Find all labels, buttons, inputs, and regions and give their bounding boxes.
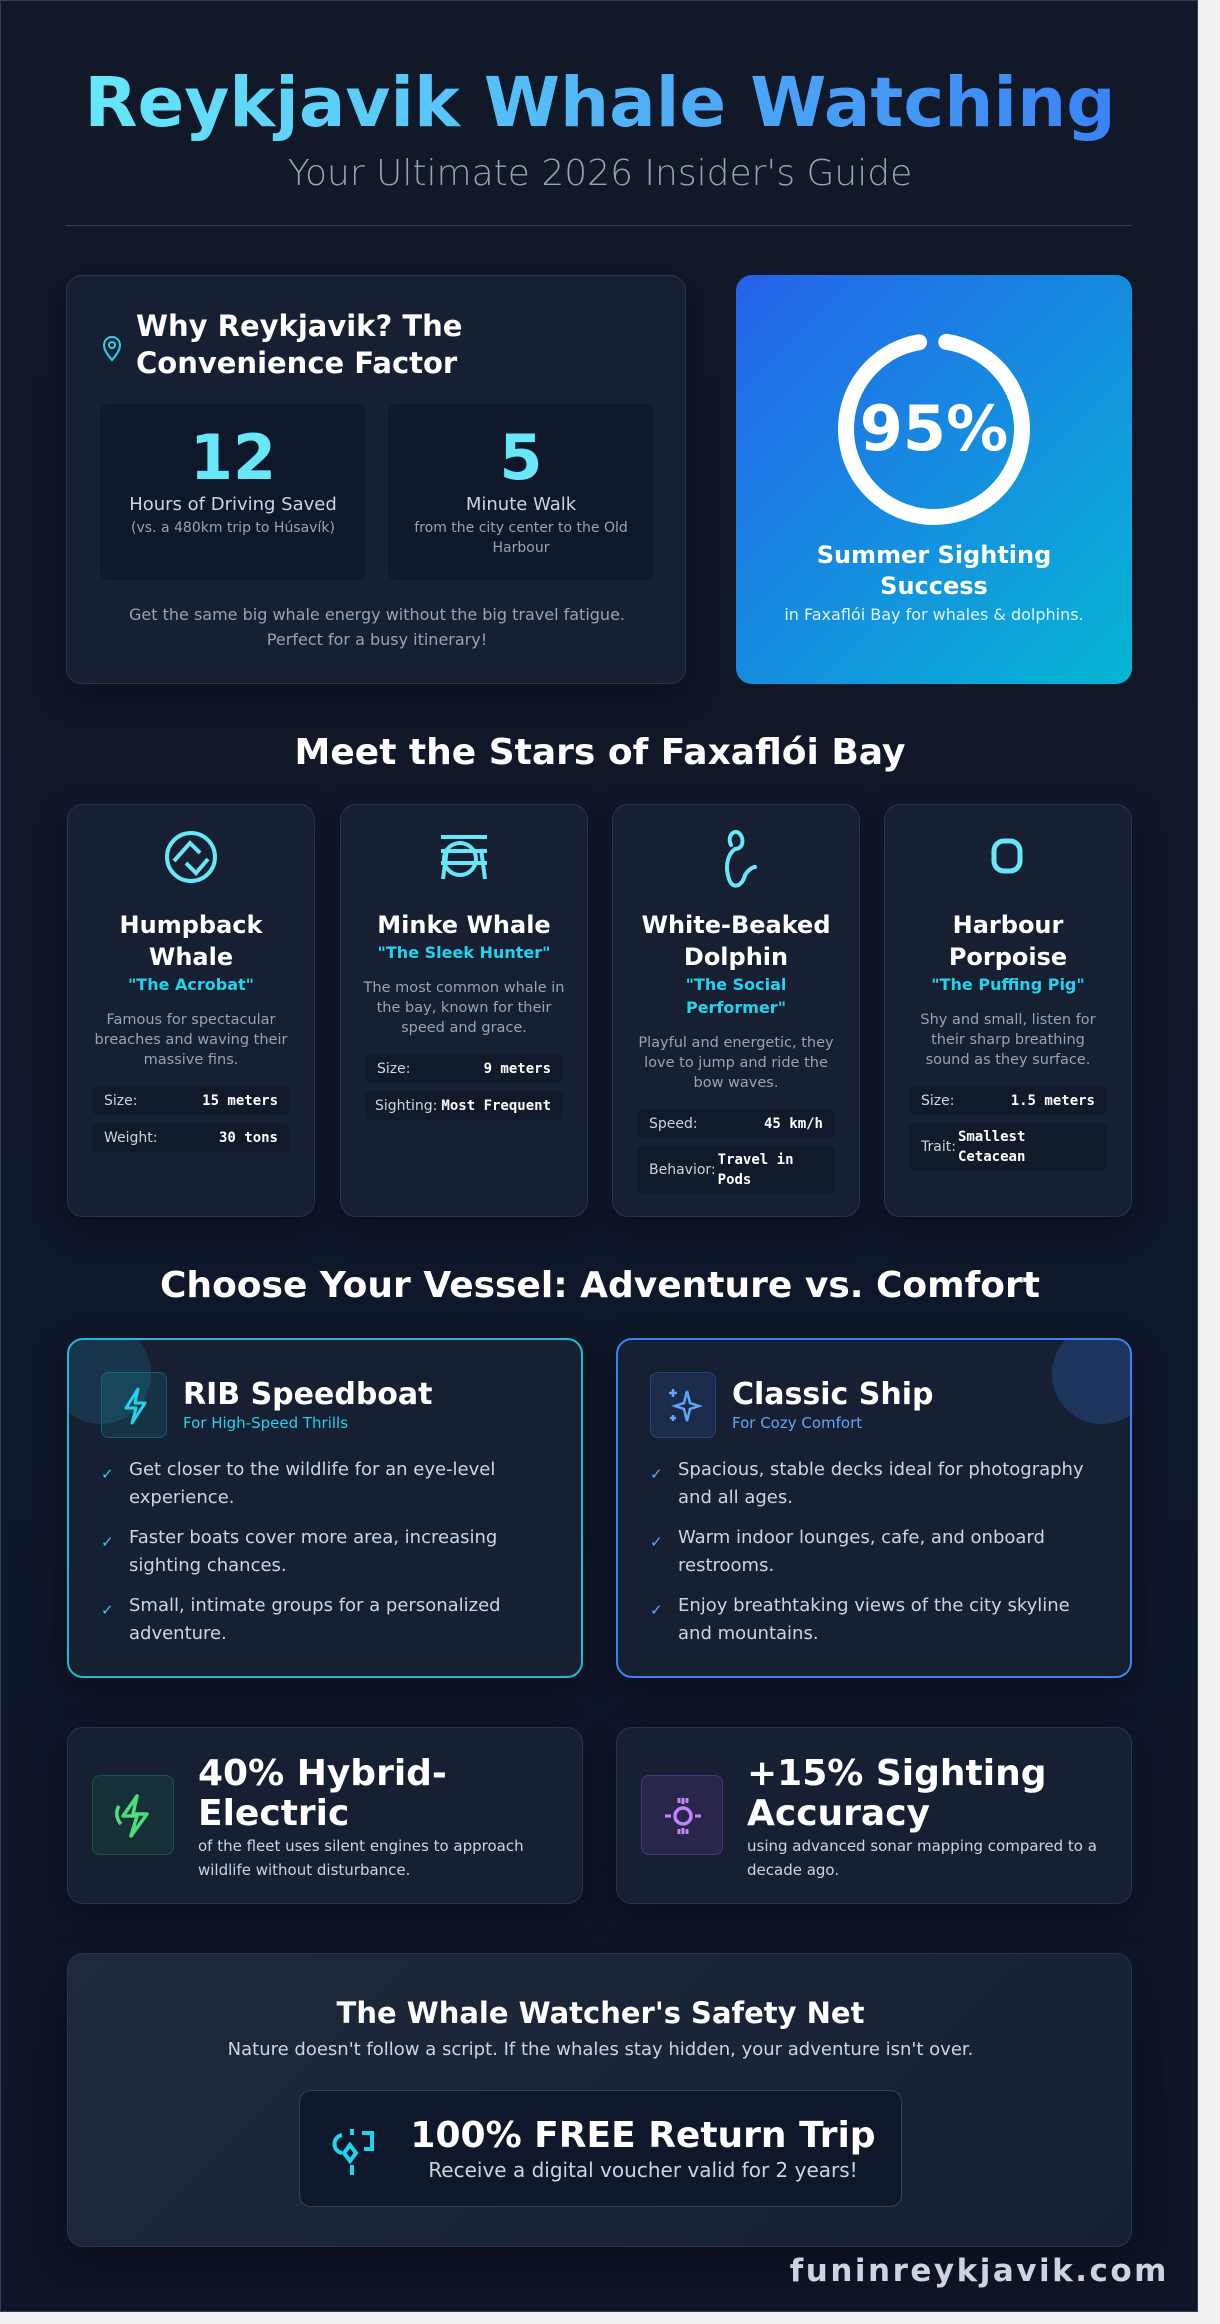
heading: RIB Speedboat [183,1377,432,1412]
panel: dolphin: Speed: [649,1116,698,1132]
list: ✓ [650,1533,663,1551]
list: ✓ [101,1465,114,1483]
heading: Classic Ship [732,1377,934,1412]
label: Summer Sighting [817,541,1051,569]
panel: humpback: Famous for spectacular breaches and waving their massive fins. [95,1012,287,1068]
panel: minke: Sighting: [375,1098,437,1114]
icon: humpback [165,831,217,883]
footer text: Perfect for a busy itinerary! [267,630,487,649]
stat: 5 minute: 5 [499,421,543,494]
footer: brand: funinreykjavik.com [790,2253,1169,2289]
icon: map pin [103,336,121,362]
panel: dolphin: "The Social [686,975,786,994]
list: Enjoy breathtaking views of the city skyline and mountains. [678,1595,1070,1644]
footer text [129,605,625,649]
big number: 95% [860,392,1008,465]
panel: dolphin: Pods [718,1172,751,1188]
panel: porpoise: Porpoise [949,943,1067,971]
stat: 12 hours: 12 [190,421,276,494]
panel: 95% success [736,275,1132,684]
icon: green bolt [92,1775,174,1855]
panel: dolphin: Behavior: [649,1162,716,1178]
label [817,541,1051,600]
icon: dolphin [725,830,757,888]
list [650,1459,1084,1644]
panel: porpoise: Shy and small, listen for their sharp breathing sound as they surface. [920,1012,1096,1068]
panel: humpback: Weight: [104,1130,158,1146]
list: ✓ [650,1601,663,1619]
panel: dolphin: Performer" [686,998,786,1017]
panel: dolphin [612,804,860,1217]
panel: porpoise [884,804,1132,1217]
heading: Convenience Factor [136,346,457,380]
panel: porpoise: Size: [921,1092,954,1108]
panel: humpback: 15 meters [202,1092,278,1108]
panel: minke: "The Sleek Hunter" [378,943,550,962]
stat text: Accuracy [747,1793,930,1834]
icon: sun [641,1775,723,1855]
heading: meet the stars: Meet the Stars of Faxaflói Bay [295,732,905,773]
panel: hybrid electric [67,1727,583,1904]
callout: free return: 100% FREE Return Trip [410,2115,876,2156]
heading: The Whale Watcher's Safety Net [337,1996,864,2030]
stat text: of the fleet uses silent engines to approach wildlife without disturbance. [198,1837,524,1879]
panel: classic ship [616,1338,1132,1678]
stat text: +15% Sighting [747,1753,1046,1794]
icon: lightning [101,1372,167,1438]
stat: 5 minute: Minute Walk [466,494,576,515]
title: Reykjavik Whale Watching [84,63,1116,143]
subtitle: Your Ultimate 2026 Insider's Guide [288,153,912,194]
list: Warm indoor lounges, cafe, and onboard restrooms. [678,1527,1045,1576]
panel: RIB speedboat [67,1338,583,1678]
stat: 12 hours [100,404,366,580]
stat text [747,1753,1097,1879]
chart: ring [838,334,1030,525]
panel: dolphin: Playful and energetic, they love to jump and ride the bow waves. [638,1035,834,1091]
panel: safety net: Nature doesn't follow a script. If the whales stay hidden, your adventure isn't over. [228,2039,973,2060]
panel: dolphin: Travel in [718,1152,794,1168]
stat text: 40% Hybrid- [198,1753,447,1794]
list: ✓ [650,1465,663,1483]
list: Get closer to the wildlife for an eye-level experience. [129,1459,495,1508]
panel: porpoise: 1.5 meters [1011,1092,1095,1108]
stat: 12 hours: Hours of Driving Saved [129,494,337,515]
panel: porpoise: "The Puffing Pig" [931,975,1085,994]
panel: humpback: Whale [149,943,233,971]
icon: porpoise [992,838,1022,874]
icon: link [332,2129,374,2175]
heading: choose your vessel: Choose Your Vessel: Adventure vs. Comfort [160,1265,1040,1306]
list: Faster boats cover more area, increasing sighting chances. [129,1527,497,1576]
stat text: Electric [198,1793,349,1834]
panel: minke: The most common whale in the bay, known for their speed and grace. [364,980,564,1036]
panel: humpback: 30 tons [219,1130,278,1146]
panel: humpback: Size: [104,1092,137,1108]
panel: dolphin: 45 km/h [764,1116,823,1132]
panel: humpback: "The Acrobat" [128,975,254,994]
callout: free return: Receive a digital voucher valid for 2 years! [428,2158,858,2182]
list: ✓ [101,1601,114,1619]
panel: porpoise: Harbour [953,911,1063,939]
panel: safety net [67,1953,1132,2247]
panel: minke: 9 meters [484,1060,551,1076]
icon: sparkle [650,1372,716,1438]
icon: minke [441,835,487,880]
panel: minke [340,804,588,1217]
panel: RIB speedboat: For High-Speed Thrills [183,1414,348,1432]
panel: humpback [67,804,315,1217]
label: Success [880,572,988,600]
list: Small, intimate groups for a personalized adventure. [129,1595,501,1644]
panel: convenience factor [66,275,686,684]
stat text [198,1753,524,1879]
stat: 12 hours: (vs. a 480km trip to Húsavík) [131,520,335,536]
list: Spacious, stable decks ideal for photography and all ages. [678,1459,1084,1508]
stat: 5 minute [388,404,654,580]
panel: porpoise: Cetacean [958,1149,1025,1165]
stat: 5 minute: from the city center to the Old Harbour [414,520,628,556]
heading: Why Reykjavik? The [136,309,462,343]
list [101,1459,501,1644]
panel: 95% success: in Faxaflói Bay for whales & dolphins. [784,605,1084,624]
panel: porpoise: Trait: [921,1139,956,1155]
stat text: using advanced sonar mapping compared to a decade ago. [747,1837,1097,1879]
panel: sighting accuracy [616,1727,1132,1904]
panel: classic ship: For Cozy Comfort [732,1414,862,1432]
panel: dolphin: White-Beaked [641,911,831,939]
callout: free return [299,2090,902,2207]
panel: humpback: Humpback [120,911,262,939]
panel: minke: Size: [377,1060,410,1076]
panel: minke: Most Frequent [441,1098,551,1114]
panel: porpoise: Smallest [958,1129,1025,1145]
heading [136,309,462,380]
list: ✓ [101,1533,114,1551]
panel: dolphin: Dolphin [684,943,788,971]
panel: minke: Minke Whale [377,911,551,939]
footer text: Get the same big whale energy without the big travel fatigue. [129,605,625,624]
